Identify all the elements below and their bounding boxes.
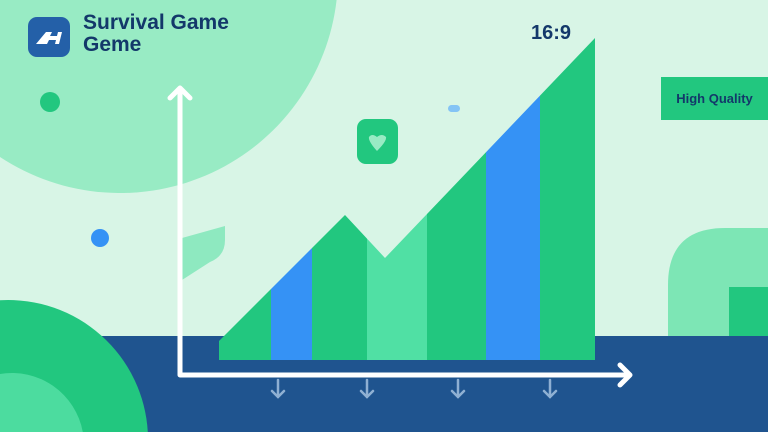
background circle top-left (0, 0, 337, 193)
bottom-left circle (0, 300, 148, 432)
High Quality badge: High Quality (676, 91, 753, 106)
icon: heart box (357, 119, 398, 164)
dark base band (0, 336, 768, 432)
down arrows (272, 380, 556, 397)
logo icon (28, 17, 70, 57)
blue pill (448, 105, 460, 112)
dot blue (91, 229, 109, 247)
title: Geme (83, 33, 141, 56)
title: Survival Game (83, 11, 229, 34)
axes arrows (170, 88, 630, 385)
16:9 label: 16:9 (531, 22, 571, 44)
leaf shape (182, 226, 225, 280)
bar chart (219, 30, 595, 360)
right rounded shape (668, 228, 768, 336)
dot green (40, 92, 60, 112)
High Quality badge (661, 77, 768, 120)
title (83, 11, 229, 56)
